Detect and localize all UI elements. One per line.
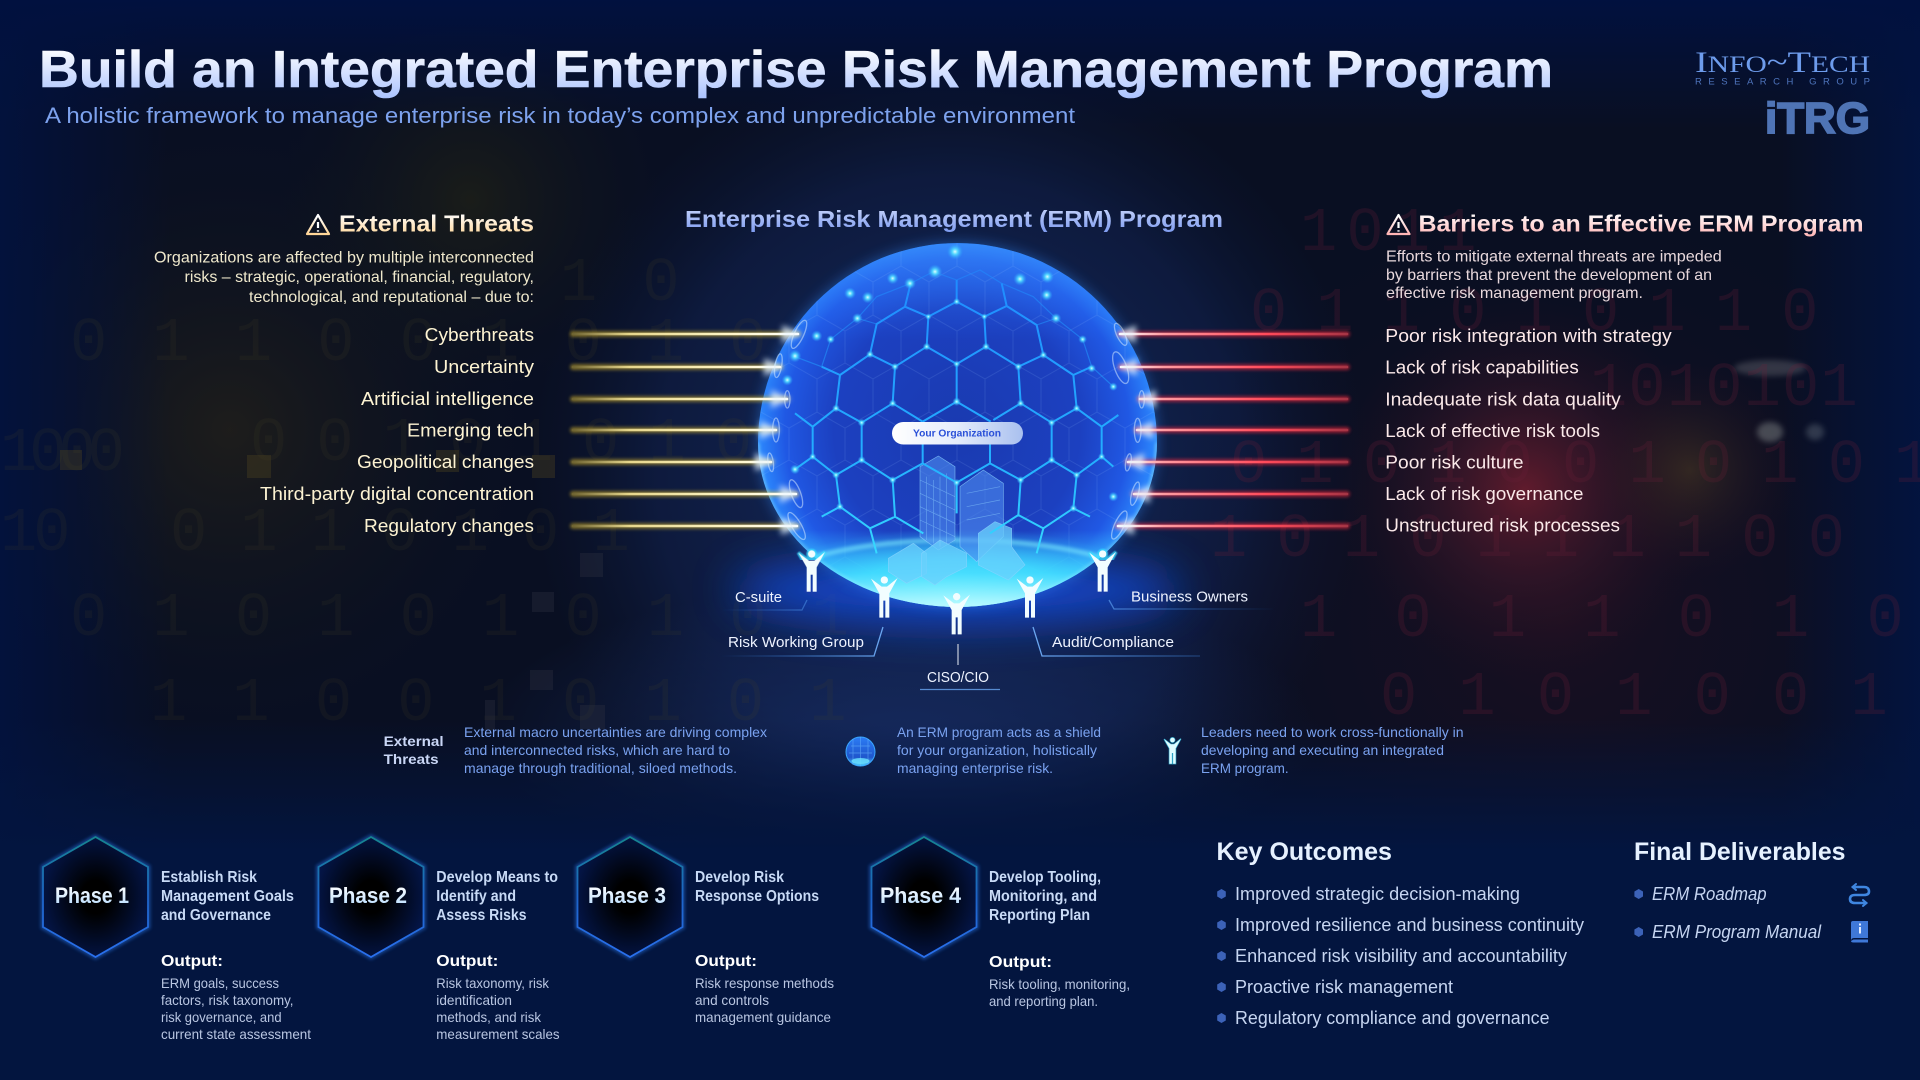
phase 4 output: Risk tooling, monitoring, xyxy=(989,976,1130,992)
logo: Info-Tech Research Group: RESEARCH GROUP xyxy=(1695,76,1870,88)
phase 4 title: Monitoring, and xyxy=(989,888,1097,905)
panel: key outcomes xyxy=(1216,838,1585,1028)
list of barriers: Poor risk integration with strategy xyxy=(1385,325,1672,346)
label: Risk Working Group: Risk Working Group xyxy=(728,635,864,651)
external threats description xyxy=(154,250,534,306)
glowing nodes xyxy=(782,244,1118,512)
background: 0 1 1 0 1 0 1 xyxy=(170,498,628,569)
red barrier beams xyxy=(1118,334,1347,526)
background: 1 0 1 1 0 1 0 xyxy=(1300,584,1914,655)
logo: Info-Tech Research Group xyxy=(1695,46,1870,143)
legend: external threats: Threats xyxy=(384,751,439,767)
list of external threats: Regulatory changes xyxy=(364,515,534,536)
phase 2 output: Output: xyxy=(436,953,498,970)
background: 0 1 0 1 0 0 1 0 1 0 1 xyxy=(1230,430,1920,501)
list of barriers: Unstructured risk processes xyxy=(1385,514,1620,536)
list of external threats: Artificial intelligence xyxy=(361,388,534,409)
key outcomes list: Improved strategic decision-making xyxy=(1235,883,1520,904)
phase 1 xyxy=(43,837,311,1042)
background: 1 0 xyxy=(560,248,684,319)
deliverable: ERM Program Manual: ERM Program Manual xyxy=(1652,921,1822,942)
icon: shield dome xyxy=(846,737,875,766)
legend text: shield: for your organization, holistically xyxy=(897,742,1097,758)
barriers description: Efforts to mitigate external threats are impeded xyxy=(1386,248,1722,266)
legend text: external threats: External macro uncertainties are driving complex xyxy=(464,724,767,740)
label: Risk Working Group xyxy=(718,627,883,656)
icon: leader figure xyxy=(1164,738,1181,764)
phase 2 xyxy=(318,837,560,1042)
label: Business Owners: Business Owners xyxy=(1131,590,1248,606)
phase 4 title: Reporting Plan xyxy=(989,907,1090,924)
background: 1000 xyxy=(0,418,122,489)
phase 3 output: management guidance xyxy=(695,1009,831,1025)
background: 1 0 1 1 xyxy=(1300,198,1474,269)
heading: barriers: Barriers to an Effective ERM Program xyxy=(1418,210,1864,236)
impact flares and rings xyxy=(755,318,1156,542)
phase 1 output: current state assessment xyxy=(161,1026,311,1042)
list of barriers xyxy=(1385,325,1672,536)
phase 4 hexagon: Phase 4 xyxy=(880,883,962,908)
phase 1 hexagon xyxy=(43,837,148,957)
label: C-suite xyxy=(723,590,807,610)
list of external threats xyxy=(260,324,535,536)
legend text: leaders xyxy=(1201,724,1464,776)
panel: external threats xyxy=(154,210,535,536)
phase 4 output: and reporting plan. xyxy=(989,993,1098,1009)
title: Build an Integrated Enterprise Risk Management Program xyxy=(39,41,1553,99)
key outcomes heading: Key Outcomes xyxy=(1216,838,1392,866)
shield dome xyxy=(732,240,1182,660)
key outcomes list: Enhanced risk visibility and accountability xyxy=(1235,945,1568,966)
label: Business Owners xyxy=(1109,590,1273,609)
phase 2 title xyxy=(436,869,558,924)
phase 2 output: measurement scales xyxy=(436,1026,560,1042)
subtitle: A holistic framework to manage enterprise risk in today’s complex and unpredictable environment xyxy=(45,103,1075,128)
phase 1 output xyxy=(161,953,311,1042)
phase 2 output xyxy=(436,953,560,1042)
phase 2 output: methods, and risk xyxy=(436,1009,542,1025)
heading: external threats: External Threats xyxy=(339,210,534,236)
external threats description: Organizations are affected by multiple interconnected xyxy=(154,250,534,266)
label: CISO/CIO: CISO/CIO xyxy=(927,670,989,686)
icon: roadmap xyxy=(1850,884,1869,906)
label: C-suite: C-suite xyxy=(735,590,782,606)
legend text: external threats: and interconnected risks, which are hard to xyxy=(464,742,730,758)
heading: ERM program: Enterprise Risk Management (ERM) Program xyxy=(685,206,1223,232)
list of external threats: Geopolitical changes xyxy=(357,451,534,472)
phase 2 output: identification xyxy=(436,992,512,1008)
icon: manual book xyxy=(1851,921,1868,942)
phase 2 title: Develop Means to xyxy=(436,869,558,886)
panel: barriers xyxy=(1385,210,1864,536)
legend text: leaders: ERM program. xyxy=(1201,760,1289,776)
background: 1 0 1 0 1 1 1 1 0 0 xyxy=(1210,504,1842,575)
key outcomes list: Proactive risk management xyxy=(1235,976,1453,997)
barriers description: effective risk management program. xyxy=(1386,285,1643,302)
phase 3 output xyxy=(695,953,834,1025)
phase 1 output: factors, risk taxonomy, xyxy=(161,992,294,1008)
key outcomes list xyxy=(1217,883,1585,1028)
phase 4 xyxy=(872,837,1130,1009)
logo: Info-Tech Research Group: iTRG xyxy=(1765,94,1870,143)
phase 3 xyxy=(578,837,834,1025)
phase 3 output: Output: xyxy=(695,953,757,970)
phase 4 title xyxy=(989,869,1101,924)
phase 1 title: Establish Risk xyxy=(161,869,257,886)
phase 1 output: Output: xyxy=(161,953,223,970)
legend text: shield xyxy=(897,724,1101,776)
list of external threats: Emerging tech xyxy=(407,420,534,440)
legend text: leaders: Leaders need to work cross-functionally in xyxy=(1201,724,1464,740)
logo: Info-Tech Research Group: INFO ~T ECH xyxy=(1695,46,1870,79)
phase 2 title: Identify and xyxy=(436,888,516,905)
label: Audit/Compliance xyxy=(1033,627,1200,656)
phase 3 output: Risk response methods xyxy=(695,975,834,991)
phase 1 title xyxy=(161,869,294,924)
phase 1 title: and Governance xyxy=(161,907,271,924)
list of external threats: Cyberthreats xyxy=(425,324,534,345)
deliverable: ERM Roadmap: ERM Roadmap xyxy=(1652,883,1767,904)
phase 4 output: Output: xyxy=(989,954,1052,971)
legend text: external threats: manage through traditional, siloed methods. xyxy=(464,760,737,776)
list of barriers: Lack of effective risk tools xyxy=(1385,420,1600,441)
icon: warning triangle xyxy=(307,215,329,234)
phase 3 hexagon xyxy=(578,837,682,957)
phase 2 title: Assess Risks xyxy=(436,907,526,924)
yellow threat beams xyxy=(573,334,798,526)
label: CISO/CIO xyxy=(920,644,1000,690)
list of barriers: Lack of risk capabilities xyxy=(1385,356,1579,378)
phase 1 output: risk governance, and xyxy=(161,1009,282,1025)
legend text: shield: managing enterprise risk. xyxy=(897,760,1053,776)
legend text: leaders: developing and executing an integrated xyxy=(1201,742,1444,758)
list of external threats: Third-party digital concentration xyxy=(260,483,534,504)
phase 1 hexagon: Phase 1 xyxy=(55,883,129,908)
list of external threats: Uncertainty xyxy=(434,356,535,377)
phase 3 hexagon: Phase 3 xyxy=(588,883,666,908)
background: 1 1 0 0 1 0 1 0 1 xyxy=(150,668,851,739)
background: 0 1 1 0 0 1 0 1 0 xyxy=(70,308,771,379)
background: 0 0 1 0 1 0 1 0 xyxy=(250,408,749,479)
background: 0 1 1 0 1 0 1 1 0 xyxy=(1250,278,1815,349)
barriers description: by barriers that prevent the development of an xyxy=(1386,267,1712,284)
phase 4 hexagon xyxy=(872,837,976,957)
phase 2 hexagon: Phase 2 xyxy=(329,883,407,908)
hexagon lattice xyxy=(795,270,1118,553)
phase 3 output: and controls xyxy=(695,992,769,1008)
organization buildings xyxy=(888,456,1025,585)
list of barriers: Poor risk culture xyxy=(1385,452,1524,472)
legend text: shield: An ERM program acts as a shield xyxy=(897,724,1101,740)
phase 3 title: Develop Risk xyxy=(695,869,784,886)
external threats description: technological, and reputational – due to: xyxy=(249,289,534,306)
label: Audit/Compliance: Audit/Compliance xyxy=(1052,635,1174,651)
phase 2 output: Risk taxonomy, risk xyxy=(436,975,550,991)
your organization label xyxy=(892,422,1023,444)
panel: final deliverables xyxy=(1634,838,1869,942)
legend: external threats: External xyxy=(384,733,444,749)
key outcomes list: Improved resilience and business continuity xyxy=(1235,914,1585,935)
background: 0 1 0 1 0 1 0 1 0 1 xyxy=(70,583,853,654)
phase 1 output: ERM goals, success xyxy=(161,975,279,991)
list of barriers: Lack of risk governance xyxy=(1385,483,1584,504)
list of barriers: Inadequate risk data quality xyxy=(1385,388,1622,410)
barriers description xyxy=(1386,248,1722,302)
legend text: external threats xyxy=(464,724,767,776)
background: 1 0 1 0 1 0 1 xyxy=(1590,353,1855,424)
key outcomes list: Regulatory compliance and governance xyxy=(1235,1007,1550,1028)
phase 2 hexagon xyxy=(318,837,424,957)
phase 3 title: Response Options xyxy=(695,888,819,905)
phase 3 title xyxy=(695,869,819,905)
phase 1 title: Management Goals xyxy=(161,888,294,905)
phase 4 title: Develop Tooling, xyxy=(989,869,1101,886)
final deliverables heading: Final Deliverables xyxy=(1634,838,1846,866)
phase 4 output xyxy=(989,954,1130,1009)
external threats description: risks – strategic, operational, financial, regulatory, xyxy=(184,269,534,286)
icon: warning triangle xyxy=(1388,215,1410,234)
your organization label: Your Organization xyxy=(913,428,1001,440)
legend: external threats xyxy=(384,733,444,767)
background: 10 xyxy=(0,498,67,569)
leaders figures xyxy=(798,550,1116,634)
